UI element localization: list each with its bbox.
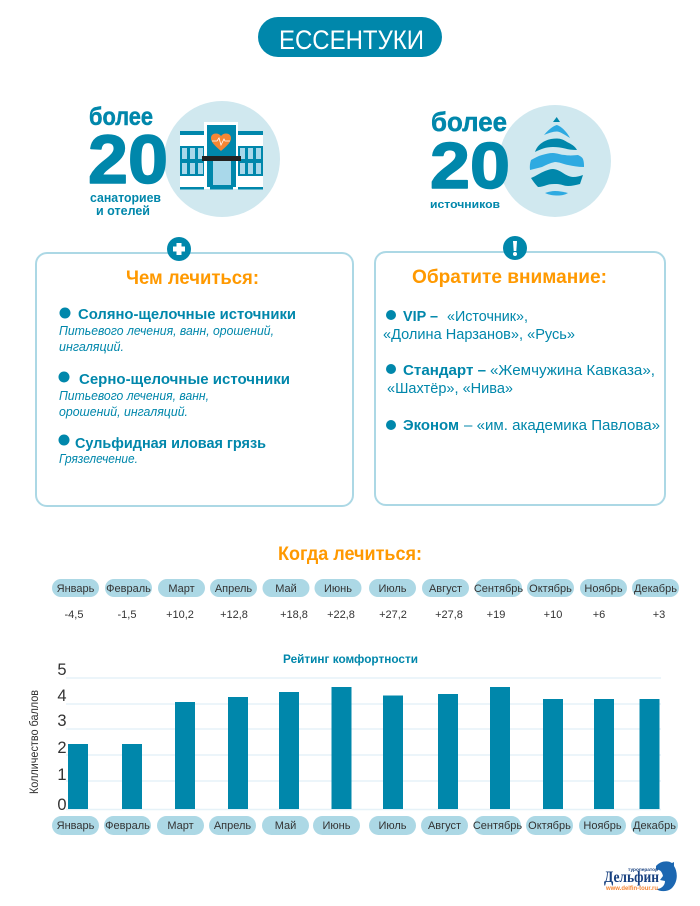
icon: exclamation mark: [503, 236, 527, 260]
heading: Обратите внимание:: [412, 267, 607, 288]
heading: when to treat: Когда лечиться:: [278, 544, 422, 565]
y axis numbers: 1: [57, 766, 67, 784]
month labels: bottom row: Июль: [378, 820, 407, 832]
chart title: Рейтинг комфортности: [283, 652, 418, 666]
temperatures: +19: [487, 609, 505, 621]
item: economy: [386, 418, 660, 434]
month labels: bottom row: Декабрь: [633, 820, 676, 832]
temperatures: [65, 609, 665, 621]
month labels: top row: Февраль: [106, 583, 151, 595]
month labels: top row: Май: [275, 583, 297, 595]
logo: Delfin tour: www.delfin-tour.ru: [605, 885, 658, 892]
month labels: bottom row: Ноябрь: [583, 820, 622, 832]
item: standard: «Шахтёр», «Нива»: [387, 381, 513, 397]
item: saline-alkaline springs: Соляно-щелочные источники: [78, 307, 296, 323]
stat: sanatoriums and hotels: [88, 101, 280, 218]
item: standard: «Жемчужина Кавказа»,: [490, 363, 655, 379]
item: saline-alkaline springs: [59, 307, 296, 354]
item: sulfur-alkaline springs: Питьевого лечения, ванн,: [59, 389, 209, 403]
stat: sanatoriums and hotels: и отелей: [96, 204, 150, 218]
logo: Delfin tour: [604, 861, 677, 892]
month labels: bottom row: [52, 816, 678, 835]
title: ЕССЕНТУКИ: [279, 25, 424, 55]
temperatures: +10: [544, 609, 562, 621]
month labels: bottom row: Апрель: [214, 820, 251, 832]
item: VIP: [383, 309, 575, 343]
item: economy: Эконом: [403, 418, 459, 434]
y axis numbers: 2: [57, 739, 67, 757]
item: standard: [386, 363, 655, 397]
stat: sanatoriums and hotels: 20: [88, 121, 168, 198]
month labels: bottom row: Январь: [57, 820, 95, 832]
temperatures: -4,5: [65, 609, 83, 621]
item: sulfide mud: Сульфидная иловая грязь: [75, 436, 266, 452]
month labels: top row: Ноябрь: [584, 583, 623, 595]
month labels: top row: Декабрь: [634, 583, 677, 595]
item: sulfur-alkaline springs: орошений, ингаляций.: [59, 405, 188, 419]
month labels: top row: Март: [168, 583, 195, 595]
y axis numbers: 4: [57, 687, 67, 705]
month labels: top row: Апрель: [215, 583, 252, 595]
y axis numbers: 5: [57, 661, 67, 679]
axis title: Колличество баллов: [29, 690, 41, 794]
item: VIP: «Источник»,: [447, 309, 528, 325]
temperatures: +27,2: [379, 609, 407, 621]
temperatures: +22,8: [327, 609, 355, 621]
stat: sanatoriums and hotels: санаториев: [90, 191, 161, 205]
panel: what to treat: [36, 237, 353, 506]
temperatures: +10,2: [166, 609, 194, 621]
temperatures: +18,8: [280, 609, 308, 621]
item: sulfur-alkaline springs: [58, 372, 290, 419]
month labels: bottom row: Февраль: [105, 820, 150, 832]
month labels: top row: Июль: [378, 583, 407, 595]
item: economy: – «им. академика Павлова»: [464, 418, 660, 434]
month labels: bottom row: Май: [275, 820, 296, 832]
icon: dolphin: [656, 861, 677, 891]
item: sulfide mud: [58, 434, 266, 466]
temperatures: +27,8: [435, 609, 463, 621]
icon: water drop: [499, 105, 611, 217]
item: saline-alkaline springs: Питьевого лечения, ванн, орошений,: [59, 324, 274, 338]
month labels: top row: Июнь: [324, 583, 352, 595]
month labels: top row: Январь: [57, 583, 95, 595]
title: [258, 17, 442, 57]
month labels: top row: Сентябрь: [474, 583, 523, 595]
icon: plus: [167, 237, 191, 261]
item: sulfur-alkaline springs: Серно-щелочные источники: [79, 372, 290, 388]
month labels: bottom row: Август: [428, 820, 461, 832]
logo: Delfin tour: Дельфин: [604, 869, 659, 886]
month labels: bottom row: Сентябрь: [473, 820, 522, 832]
logo: Delfin tour: туроператор: [628, 867, 658, 872]
item: VIP: «Долина Нарзанов», «Русь»: [383, 327, 575, 343]
month labels: bottom row: Октябрь: [528, 820, 571, 832]
temperatures: +3: [653, 609, 665, 621]
stat: springs: 20: [430, 129, 510, 202]
heading: Чем лечиться:: [126, 268, 259, 289]
y axis numbers: 3: [57, 712, 67, 730]
month labels: bottom row: Июнь: [323, 820, 351, 832]
temperatures: +12,8: [220, 609, 248, 621]
temperatures: +6: [593, 609, 605, 621]
item: VIP: VIP –: [403, 309, 438, 325]
month labels: bottom row: Март: [167, 820, 194, 832]
month labels: top row: Август: [429, 583, 462, 595]
y axis numbers: 0: [57, 796, 67, 814]
icon: hospital building: [164, 101, 280, 217]
month labels: top row: Октябрь: [529, 583, 572, 595]
stat: springs: [430, 105, 611, 217]
item: standard: Стандарт –: [403, 363, 486, 379]
temperatures: -1,5: [118, 609, 136, 621]
bar chart: comfort rating: [29, 652, 661, 814]
month labels: top row: [52, 579, 679, 597]
stat: springs: источников: [430, 199, 500, 211]
y axis numbers: [57, 661, 67, 814]
stat: springs: более: [431, 107, 507, 137]
item: sulfide mud: Грязелечение.: [59, 452, 138, 466]
panel: pay attention: [375, 236, 665, 505]
bars: [68, 687, 660, 809]
item: saline-alkaline springs: ингаляций.: [59, 340, 124, 354]
stat: sanatoriums and hotels: более: [89, 103, 153, 131]
